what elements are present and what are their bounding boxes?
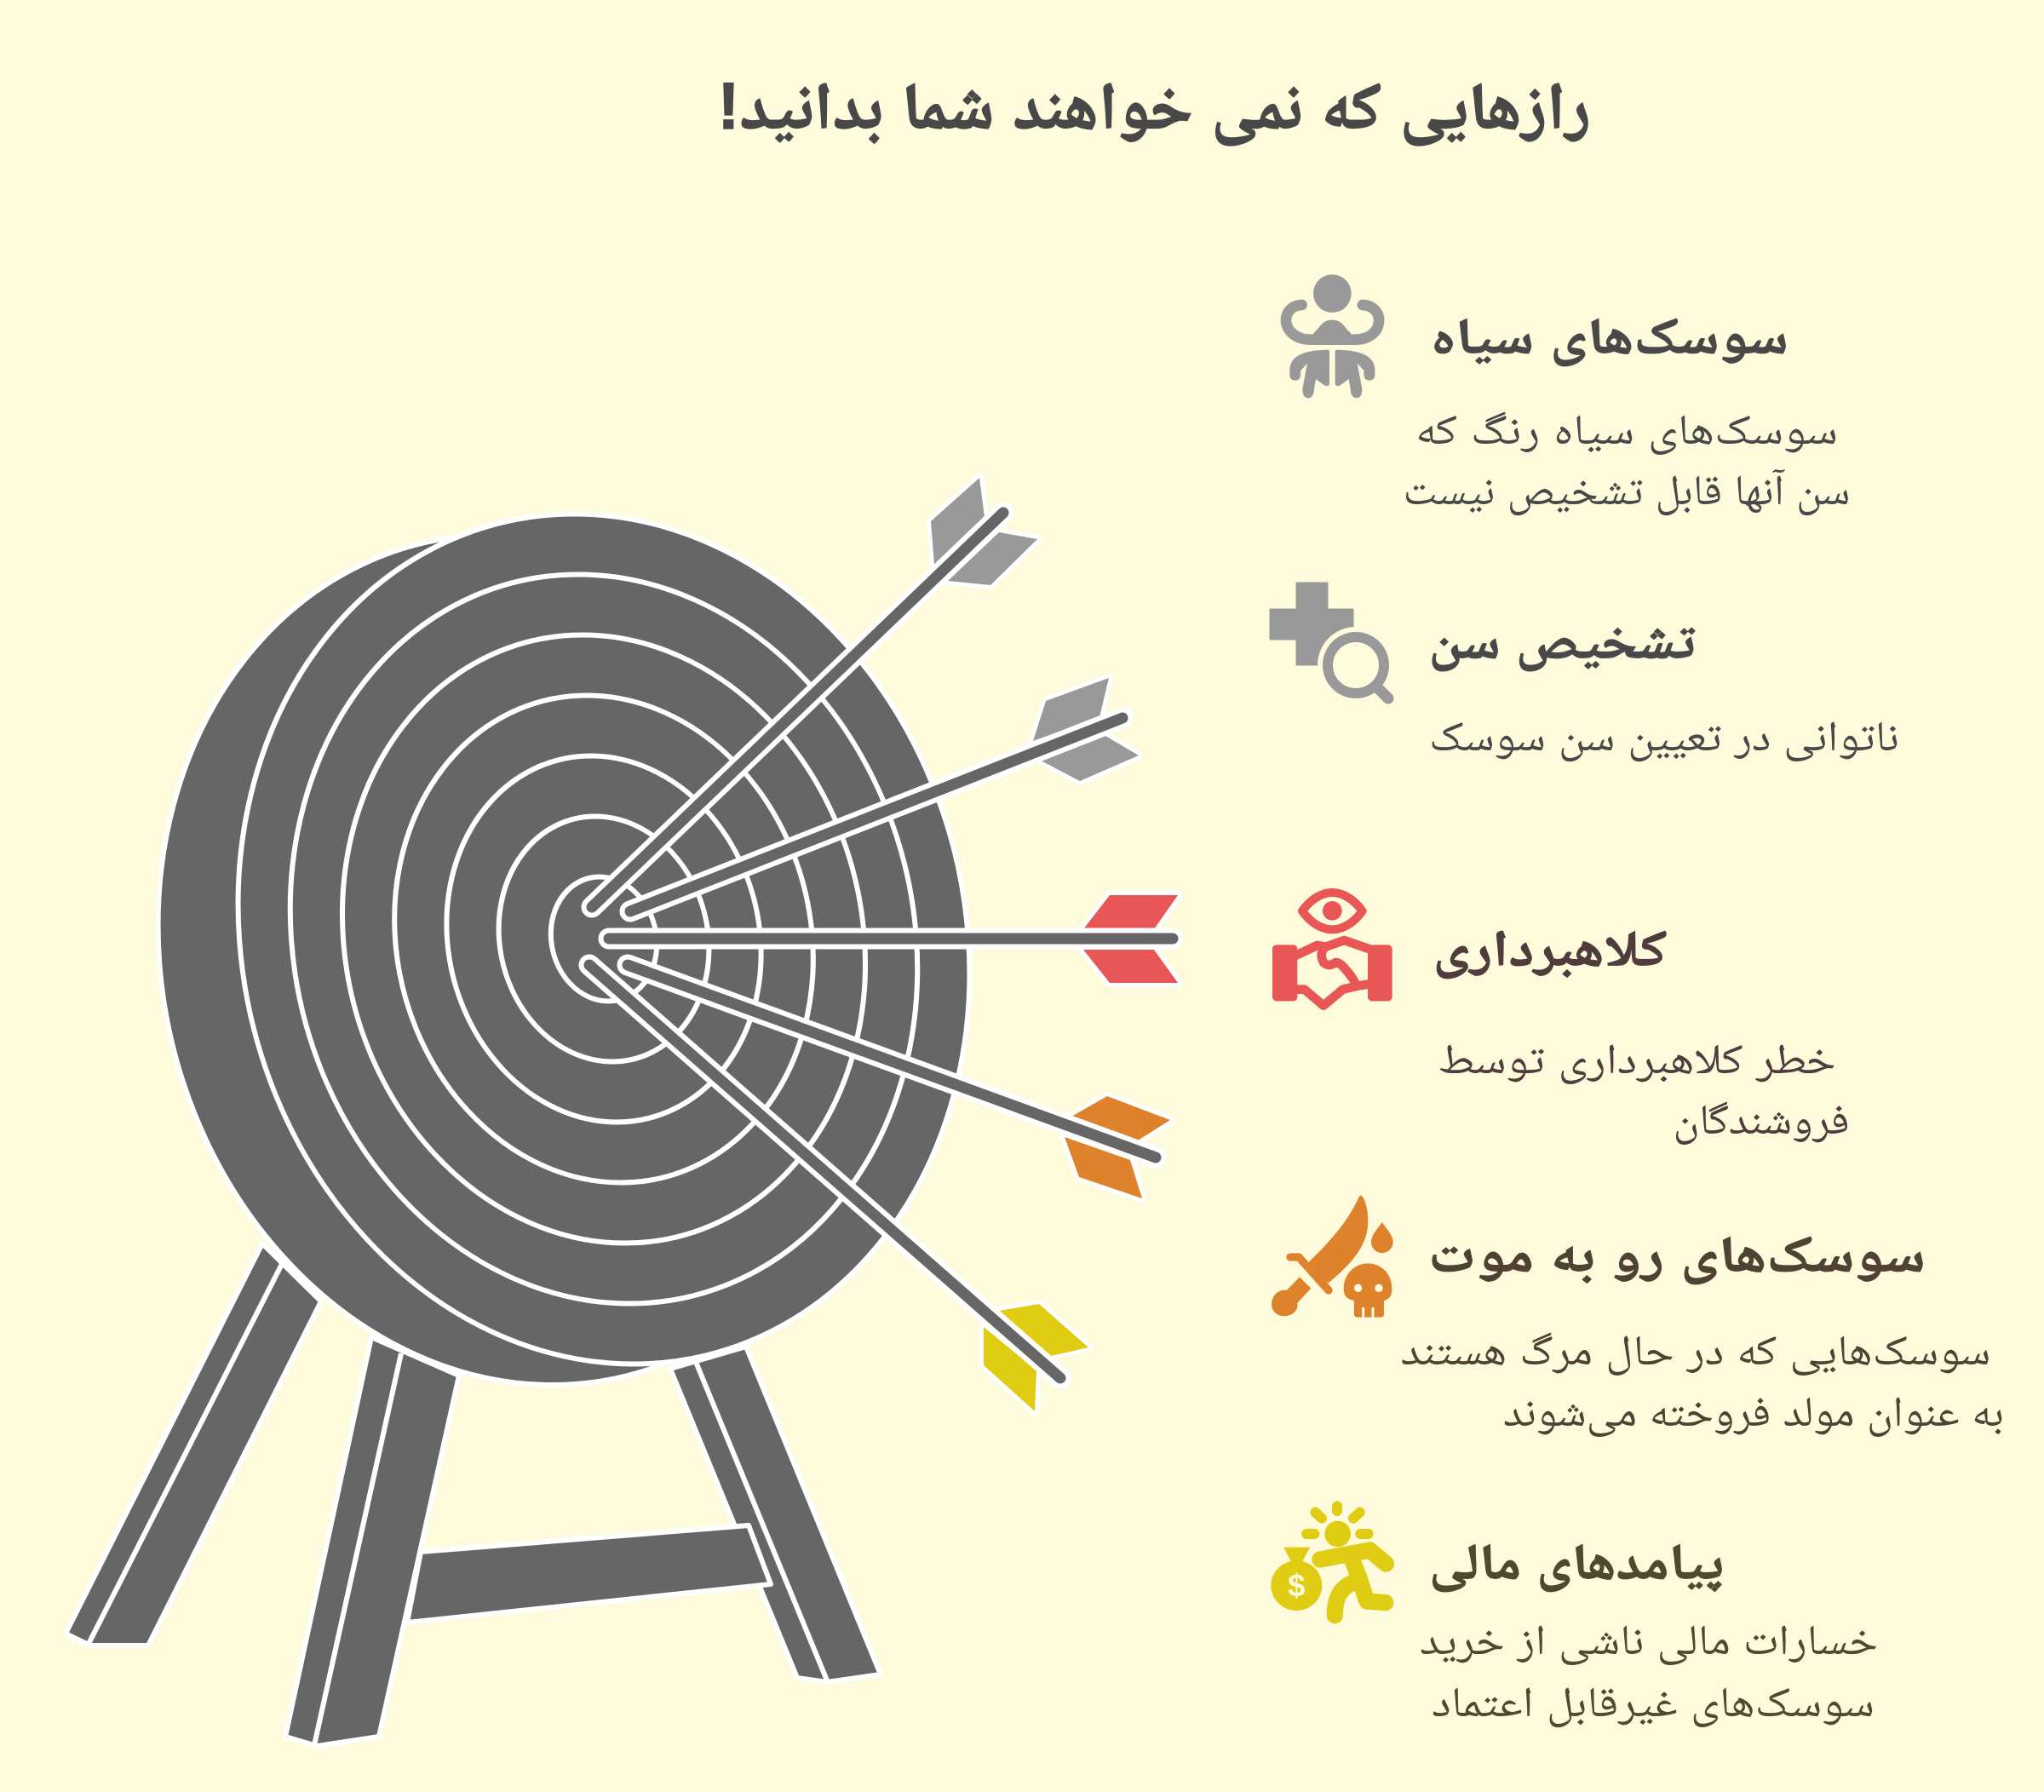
description: financial consequences: سوسک‌های غیرقابل اعتماد	[1432, 1678, 1875, 1728]
target face rings	[210, 514, 998, 1364]
description: dying cockroaches	[1400, 1326, 2004, 1437]
icon: running man with money bag: $	[1288, 1568, 1306, 1603]
title: رازهایی که نمی خواهند شما بدانید!	[717, 68, 1591, 146]
description: financial consequences	[1420, 1616, 1878, 1728]
target illustration	[66, 478, 1178, 1746]
description: black cockroaches	[1404, 405, 1850, 516]
stand crossbar	[407, 1525, 771, 1623]
arrow: red	[609, 895, 1178, 983]
heading: fraud: کلاهبرداری	[1433, 920, 1668, 979]
description: black cockroaches: سوسک‌های سیاه رنگ که	[1415, 405, 1838, 455]
icon: black cockroach figure	[1286, 274, 1379, 398]
arrow: yellow	[589, 965, 1088, 1411]
description: fraud: خطر کلاهبرداری توسط	[1438, 1035, 1836, 1084]
icon: eye and handshake	[1272, 893, 1392, 1006]
heading: black cockroaches: سوسک‌های سیاه	[1431, 307, 1788, 366]
description: age detection: ناتوانی در تعیین سن سوسک	[1429, 712, 1899, 762]
arrow: gray top	[592, 478, 1037, 907]
description: fraud: فروشندگان	[1673, 1095, 1850, 1145]
description: fraud	[1438, 1035, 1850, 1145]
icon: running man with money bag	[1271, 1506, 1386, 1616]
description: dying cockroaches: به عنوان مولد فروخته می‌شوند	[1503, 1387, 2004, 1437]
arrow: gray second	[630, 678, 1139, 911]
icon: plus and magnifier	[1271, 583, 1388, 698]
target back side	[129, 535, 916, 1385]
icon: sword and skull	[1272, 1195, 1393, 1318]
stand legs	[66, 1243, 881, 1746]
arrow: orange	[628, 965, 1170, 1198]
description: black cockroaches: سن آنها قابل تشخیص نیست	[1404, 466, 1850, 516]
heading: dying cockroaches: سوسک‌های رو به موت	[1428, 1226, 1926, 1284]
description: dying cockroaches: سوسک‌هایی که در حال مرگ هستند	[1400, 1326, 1991, 1376]
heading: age detection: تشخیص سن	[1429, 612, 1695, 672]
description: financial consequences: خسارات مالی ناشی از خرید	[1420, 1616, 1878, 1665]
heading: financial consequences: پیامدهای مالی	[1429, 1533, 1724, 1593]
